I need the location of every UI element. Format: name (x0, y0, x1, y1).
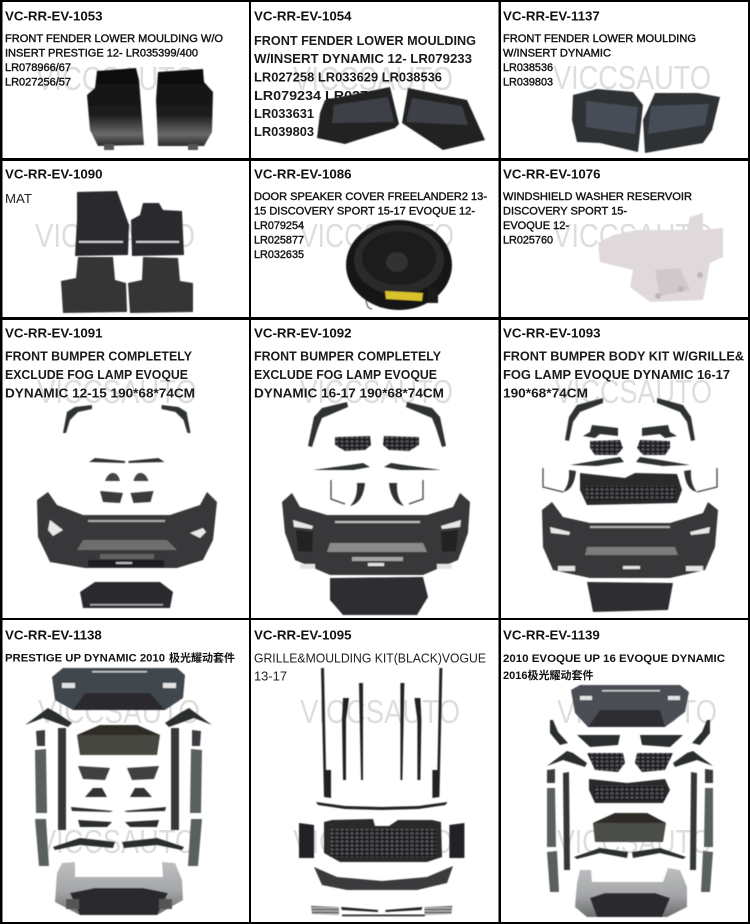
description: LR027256/57 (5, 76, 71, 88)
product image: fender mouldings dynamic (572, 89, 720, 153)
watermark (38, 693, 200, 860)
description: FOG LAMP EVOQUE DYNAMIC 16-17 (503, 368, 730, 382)
product code: VC-RR-EV-1091 (5, 325, 103, 340)
watermark (293, 693, 460, 860)
panel: VC-RR-EV-1092 (251, 320, 498, 618)
watermark: VICCSAUTO (557, 693, 717, 730)
watermark: VICCSAUTO (555, 373, 712, 410)
description: 190*68*74CM (503, 387, 588, 401)
watermark (557, 693, 717, 860)
watermark: VICCSAUTO (293, 823, 453, 860)
description: MAT (5, 191, 32, 206)
description: LR039803 (503, 76, 553, 88)
panel: VC-RR-EV-1137 (501, 2, 748, 158)
description: EXCLUDE FOG LAMP EVOQUE (254, 368, 437, 382)
description: 15 DISCOVERY SPORT 15-17 EVOQUE 12- (254, 206, 475, 218)
panel: VC-RR-EV-1076 (501, 161, 748, 317)
product code: VC-RR-EV-1086 (254, 166, 352, 182)
description: 2016极光耀动套件 (503, 668, 593, 682)
description (254, 34, 476, 139)
description: LR027258 LR033629 LR038536 (254, 70, 442, 84)
panel: VC-RR-EV-1090 (2, 161, 249, 317)
product code: VC-RR-EV-1095 (254, 628, 352, 642)
watermark: VICCSAUTO (36, 60, 196, 97)
product code: VC-RR-EV-1054 (254, 8, 352, 24)
product code: VC-RR-EV-1093 (503, 325, 601, 340)
watermark: VICCSAUTO (557, 823, 712, 860)
description: EXCLUDE FOG LAMP EVOQUE (5, 368, 188, 382)
watermark: VICCSAUTO (35, 217, 195, 254)
description: DYNAMIC 16-17 190*68*74CM (254, 387, 444, 401)
product image: floor mats (61, 191, 193, 313)
panel: VC-RR-EV-1053 (2, 2, 249, 158)
panel: VC-RR-EV-1139 (501, 620, 748, 922)
product code: VC-RR-EV-1076 (503, 166, 601, 182)
description: LR025760 (503, 234, 553, 246)
product image: door speaker (346, 220, 452, 310)
panel: VC-RR-EV-1093 (501, 320, 748, 618)
watermark: VICCSAUTO (37, 373, 197, 410)
product code: VC-RR-EV-1139 (503, 628, 600, 642)
description: FRONT FENDER LOWER MOULDING W/O (5, 33, 223, 45)
panel: VC-RR-EV-1095 (251, 620, 498, 922)
description: W/INSERT DYNAMIC 12- LR079233 (254, 52, 472, 66)
description: W/INSERT DYNAMIC (503, 47, 611, 59)
description: LR038536 (503, 62, 553, 74)
description: FRONT FENDER LOWER MOULDING (503, 33, 696, 45)
description: FRONT BUMPER COMPLETELY (254, 350, 442, 364)
description (254, 650, 486, 684)
panel: VC-RR-EV-1138 (2, 620, 249, 922)
description (254, 350, 444, 401)
description: FRONT BUMPER BODY KIT W/GRILLE& (503, 350, 744, 364)
product image: grille and moulding kit (299, 668, 464, 916)
description: 13-17 (254, 669, 287, 684)
description: PRESTIGE UP DYNAMIC 2010 (5, 653, 165, 665)
watermark: VICCSAUTO (300, 217, 454, 254)
watermark: VICCSAUTO (553, 59, 711, 96)
description (5, 33, 223, 88)
watermark: VICCSAUTO (300, 693, 460, 730)
watermark: VICCSAUTO (38, 693, 200, 730)
description: LR033631 (254, 107, 314, 121)
description: LR079234 LR0278 (254, 89, 376, 103)
description: DISCOVERY SPORT 15- (503, 206, 627, 218)
description: 极光耀动套件 (169, 651, 235, 665)
description: WINDSHIELD WASHER RESERVOIR (503, 191, 692, 203)
product image: body kit (25, 668, 212, 915)
description: LR039803 (254, 125, 314, 139)
panel: VC-RR-EV-1091 (2, 320, 249, 618)
product image: bumper kit (37, 405, 217, 608)
description: FRONT BUMPER COMPLETELY (5, 350, 193, 364)
product code: VC-RR-EV-1090 (5, 166, 103, 182)
watermark: VICCSAUTO (300, 373, 453, 410)
panel: VC-RR-EV-1054 (251, 2, 498, 158)
description: INSERT PRESTIGE 12- LR035399/400 (5, 48, 198, 60)
product image: washer reservoir (598, 213, 723, 302)
description: LR078966/67 (5, 62, 71, 74)
description (254, 191, 487, 261)
description (5, 651, 235, 665)
product image: upgrade kit (547, 685, 713, 917)
product image: fender mouldings (87, 68, 213, 150)
product image: bumper body kit (542, 398, 718, 612)
description: LR079254 (254, 220, 304, 232)
description: LR025877 (254, 234, 304, 246)
watermark: VICCSAUTO (293, 60, 453, 97)
description: DYNAMIC 12-15 190*68*74CM (5, 387, 195, 401)
watermark: VICCSAUTO (553, 217, 713, 254)
description (503, 350, 744, 401)
description (5, 350, 195, 401)
product image: bumper kit (282, 402, 470, 615)
description: LR032635 (254, 249, 304, 261)
product code: VC-RR-EV-1092 (254, 325, 352, 340)
watermark: VICCSAUTO (38, 823, 196, 860)
description: 2010 EVOQUE UP 16 EVOQUE DYNAMIC (503, 653, 725, 665)
description: DOOR SPEAKER COVER FREELANDER2 13- (254, 191, 487, 203)
product image: fender mouldings with insert (317, 87, 485, 150)
panel: VC-RR-EV-1086 (251, 161, 498, 317)
product code: VC-RR-EV-1053 (5, 8, 103, 24)
product code: VC-RR-EV-1137 (503, 8, 600, 24)
description (503, 33, 696, 88)
description: GRILLE&MOULDING KIT(BLACK)VOGUE (254, 650, 486, 665)
description: EVOQUE 12- (503, 220, 569, 232)
description: FRONT FENDER LOWER MOULDING (254, 34, 476, 48)
product code: VC-RR-EV-1138 (5, 628, 102, 642)
description (503, 653, 725, 682)
description (503, 191, 692, 246)
